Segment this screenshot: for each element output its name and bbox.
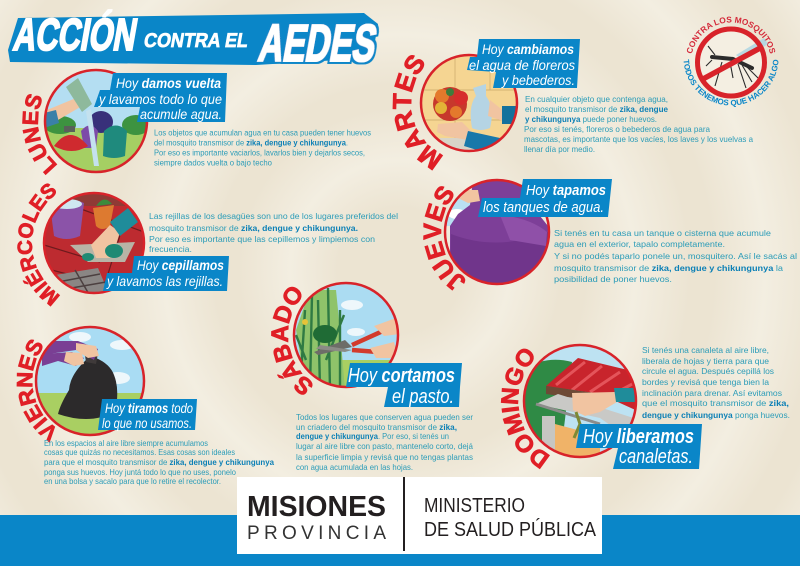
panel: jueves <box>423 178 797 291</box>
body text: viernes: En los espacios al aire libre siempre acumulamos <box>44 438 208 448</box>
day label: sábado: SÁBADO <box>271 286 312 395</box>
body text: miércoles: Por eso es importante que las cepillemos y limpiemos con <box>149 234 375 244</box>
body text: jueves: Y si no podés taparlo ponele un, mosquitero. Así le sacás al <box>554 251 797 261</box>
body text: viernes: ponga sus huevos. Hoy juntá todo lo que no uses, ponelo <box>44 467 236 477</box>
body text: domingo: dengue y chikungunya ponga huevos. <box>642 410 790 420</box>
body text: domingo: liberala de hojas y tierra para que <box>642 356 769 366</box>
callout: hoy tapamos: los tanques de agua. <box>483 200 604 216</box>
body text: domingo: Si tenés una canaleta al aire libre, <box>642 345 769 355</box>
body text: domingo <box>642 345 790 420</box>
body text: martes: Por eso si tenés, floreros o bebederos de agua para <box>524 124 710 134</box>
day label: martes: MARTES <box>392 55 444 171</box>
panel: martes <box>392 39 754 171</box>
callout: hoy tiramos: Hoy tiramos todo <box>105 400 193 416</box>
illustration: trash bag <box>35 326 145 437</box>
callout: hoy cambiamos <box>467 39 580 88</box>
title text: ACCIÓN: ACCIÓN <box>10 8 141 60</box>
callout: hoy cortamos: Hoy cortamos <box>348 365 455 387</box>
body text: martes: llenar día por medio. <box>524 144 595 154</box>
body text: jueves: agua en el exterior, tapalo completamente. <box>554 239 725 249</box>
body text: jueves: posibilidad de poner huevos. <box>554 274 672 284</box>
logo text: De Salud Pública: DE SALUD PÚBLICA <box>424 518 597 541</box>
illustration: brush and drain <box>43 192 146 300</box>
body text: domingo: que el mosquito transmisor de zika, <box>642 398 789 408</box>
logo text: Misiones: MISIONES <box>247 491 386 523</box>
panel: miércoles <box>17 183 398 307</box>
callout: hoy damos vuelta: y lavamos todo lo que <box>98 91 222 107</box>
callout: hoy liberamos: Hoy liberamos <box>583 426 694 448</box>
callout: hoy cortamos: el pasto. <box>392 386 454 408</box>
body text: sábado: Todos los lugares que conserven agua pueden ser <box>296 412 473 422</box>
body text: domingo: inclinación para drenar. Así evitamos <box>642 388 782 398</box>
panel: sábado <box>271 282 473 472</box>
title banner <box>8 8 381 73</box>
body text: viernes: cosas que quizás no necesitamos. Esas cosas son ideales <box>44 447 235 457</box>
body text: sábado: con agua acumulada en las hojas. <box>296 462 413 472</box>
callout: hoy tapamos: Hoy tapamos <box>526 183 606 199</box>
body text: lunes: siempre dados vuelta o bajo techo <box>154 158 272 168</box>
body text: domingo: circule el agua. Después cepillá los <box>642 366 774 376</box>
callout: hoy liberamos <box>576 424 702 469</box>
body text: jueves <box>554 228 797 284</box>
title text: CONTRA EL: CONTRA EL <box>142 30 250 52</box>
callout: hoy tapamos <box>478 179 612 217</box>
body text: viernes: en una bolsa y sacalo para que lo retire el recolector. <box>44 476 221 486</box>
body text: miércoles <box>149 211 398 254</box>
callout: hoy damos vuelta: Hoy damos vuelta <box>116 75 221 91</box>
callout: hoy cambiamos: el agua de floreros <box>469 57 575 73</box>
body text: lunes: del mosquito transmisor de zika, dengue y chikungunya. <box>154 138 348 148</box>
badge: contra los mosquitos <box>684 16 778 107</box>
day label: lunes: LUNES <box>22 94 58 176</box>
badge circular text top: CONTRA LOS MOSQUITOS <box>686 16 776 54</box>
body text: miércoles: mosquito transmisor de zika, dengue y chikungunya. <box>149 223 358 233</box>
body text: lunes: Por eso es importante vaciarlos, lavarlos bien y dejarlos secos, <box>154 148 365 158</box>
badge circular text bottom: TODOS TENEMOS QUE HACER ALGO <box>684 59 778 107</box>
body text: viernes <box>44 438 274 486</box>
body text: martes: En cualquier objeto que contenga agua, <box>525 94 668 104</box>
illustration: bottle and containers <box>44 69 150 174</box>
callout: hoy tiramos <box>98 399 197 431</box>
callout: hoy cepillamos: y lavamos las rejillas. <box>106 273 223 289</box>
day label: domingo: DOMINGO <box>500 348 550 470</box>
callout: hoy liberamos: canaletas. <box>619 446 693 468</box>
callout: hoy cepillamos: Hoy cepillamos <box>137 257 224 273</box>
body text: lunes <box>154 128 371 168</box>
panel: lunes <box>22 68 371 176</box>
callout: hoy cambiamos: y bebederos. <box>501 72 575 88</box>
panel: viernes <box>16 326 274 486</box>
body text: jueves: Si tenés en tu casa un tanque o cisterna que acumule <box>554 228 771 238</box>
banner shape <box>8 13 378 65</box>
body text: sábado: lugar al aire libre con pasto, mantenelo corto, dejá <box>296 441 473 451</box>
illustration: flowers and vase <box>420 54 520 156</box>
footer band <box>0 515 800 566</box>
title text: AEDES: AEDES <box>255 15 381 73</box>
illustration: water tank <box>444 178 550 290</box>
callout: hoy cambiamos: Hoy cambiamos <box>482 41 574 57</box>
day label: miércoles: MIÉRCOLES <box>17 183 60 307</box>
body text: viernes: para que el mosquito transmisor de zika, dengue y chikungunya <box>44 457 274 467</box>
callout: hoy cepillamos <box>103 256 229 291</box>
body text: lunes: Los objetos que acumulan agua en tu casa pueden tener huevos <box>154 128 371 138</box>
body text: martes <box>524 94 753 154</box>
illustration: grass and shears <box>293 282 400 390</box>
logo text: Provincia: PROVINCIA <box>247 523 386 544</box>
body text: sábado <box>296 412 473 472</box>
callout: hoy cortamos <box>346 363 462 408</box>
body text: martes: y chikungunya puede poner huevos. <box>525 114 657 124</box>
body text: domingo: bordes y revisá que tenga bien la <box>642 377 769 387</box>
body text: miércoles: Las rejillas de los desagües son uno de los lugares preferidos del <box>149 211 398 221</box>
callout: hoy damos vuelta <box>94 73 227 122</box>
day label: viernes: VIERNES <box>16 340 56 443</box>
body text: sábado: dengue y chikungunya. Por eso, si tenés un <box>296 431 449 441</box>
body text: miércoles: frecuencia. <box>149 244 192 254</box>
callout: hoy damos vuelta: acumule agua. <box>140 106 222 122</box>
logo: Misiones Provincia, Ministerio de Salud Pública <box>237 477 602 554</box>
day label: jueves: JUEVES <box>423 186 466 291</box>
panel: domingo <box>500 344 790 470</box>
callout: hoy tiramos: lo que no usamos. <box>102 415 192 431</box>
logo text: Ministerio: MINISTERIO <box>424 495 525 517</box>
icon: crossed mosquito <box>698 29 768 96</box>
body text: martes: el mosquito transmisor de zika, dengue <box>525 104 668 114</box>
body text: sábado: un criadero del mosquito transmisor de zika, <box>296 422 457 432</box>
illustration: roof and gutter <box>523 344 640 462</box>
body text: jueves: mosquito transmisor de zika, dengue y chikungunya la <box>554 263 783 273</box>
body text: martes: mascotas, es importante que los vacíes, los laves y los vuelvas a <box>524 134 753 144</box>
body text: sábado: la superficie limpia y revisá que no tengas plantas <box>296 452 473 462</box>
